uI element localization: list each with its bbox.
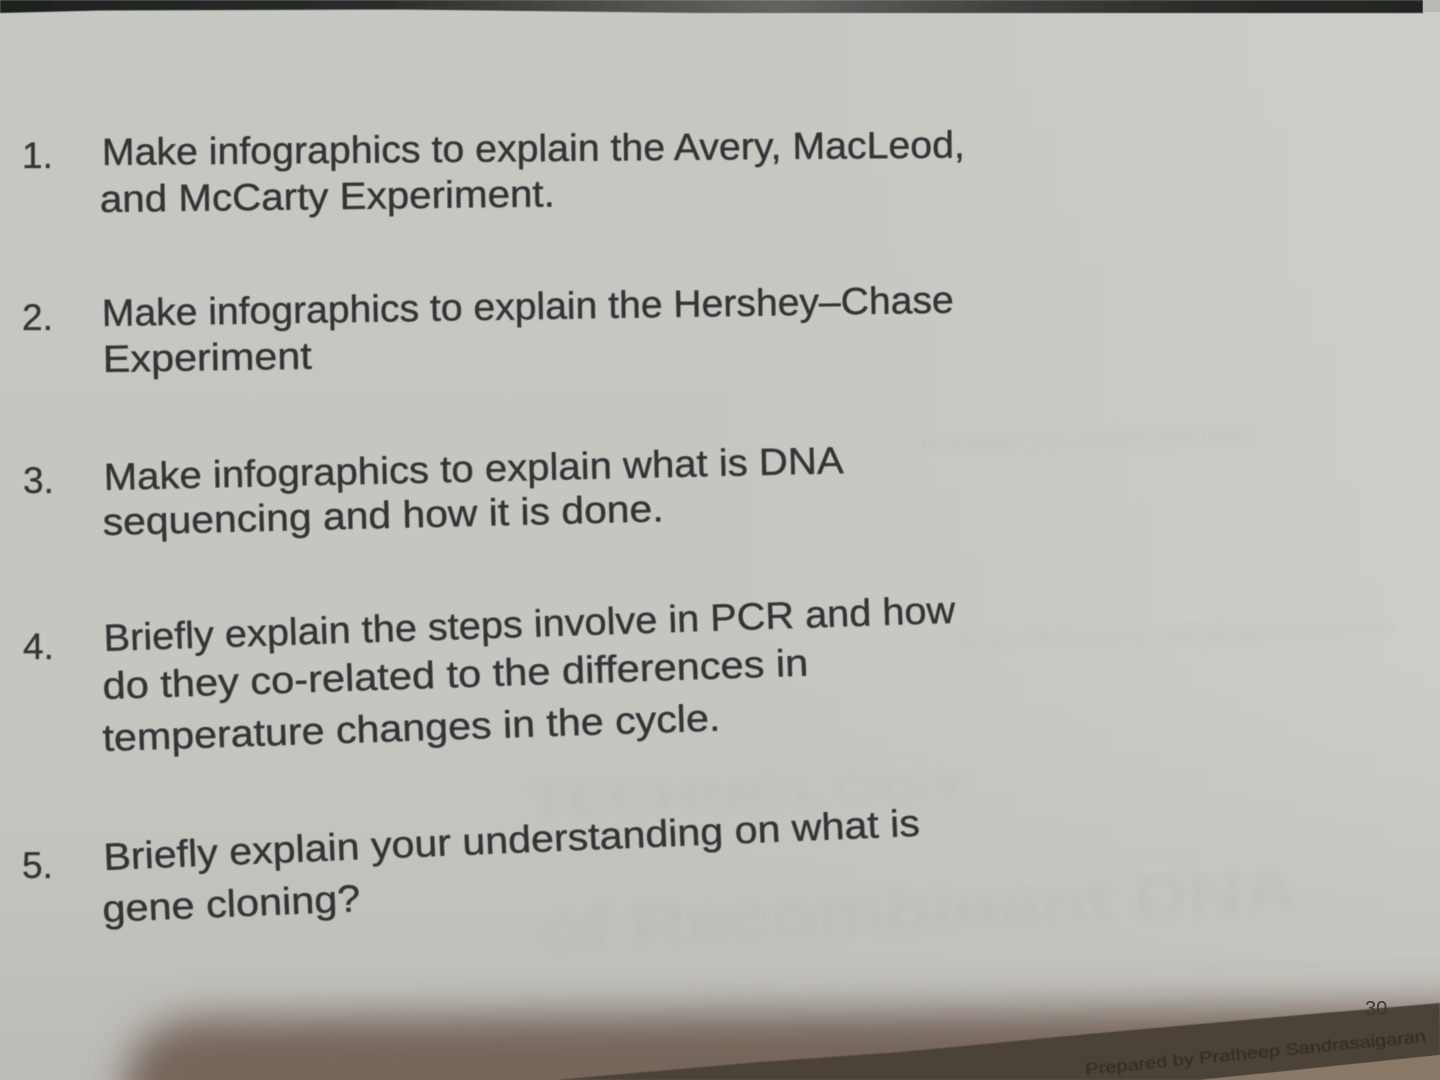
question 3: sequencing and how it is done. [102,488,664,544]
tan wedge below the footer band [1200,1055,1440,1080]
question 4: 4. [23,626,54,667]
bottom brown shadow [124,1005,1440,1080]
faint show-through text from the reverse side: DNA Molecule, carrying sequence [959,614,1390,656]
question 1: and McCarty Experiment. [100,173,555,221]
page number: 30 [1365,998,1387,1020]
dark diagonal footer band [555,1003,1440,1080]
faint show-through text from the reverse side: TECHNOLOGY [529,762,970,824]
question 4: do they co-related to the differences in [102,643,809,708]
question 1 [22,124,965,221]
question 5: Briefly explain your understanding on what is [103,803,921,879]
question 4: Briefly explain the steps involve in PCR and how [103,590,956,660]
question 4 [23,590,956,760]
question 3: Make infographics to explain what is DNA [103,440,845,499]
question 4: temperature changes in the cycle. [102,698,721,760]
question 2: 2. [22,297,53,338]
question 5: gene cloning? [102,878,361,931]
top dark edge of the page [0,0,1440,13]
question 1: Make infographics to explain the Avery, MacLeod, [102,124,965,174]
question 1: 1. [22,135,53,176]
question 3 [23,440,845,544]
faint show-through text from the reverse side [529,422,1390,963]
question 2: Experiment [102,336,313,381]
question 5 [22,803,921,931]
faint show-through text from the reverse side: is called recombinant DNA [919,422,1260,458]
faint show-through text from the reverse side: of Recombinant DNA [537,858,1300,963]
question 3: 3. [23,460,54,501]
question 2: Make infographics to explain the Hershey–Chase [101,280,954,335]
question 2 [22,280,954,381]
question 5: 5. [22,845,53,886]
footer credit: Prepared by Pratheep Sandrasaigaran [1085,1028,1427,1079]
